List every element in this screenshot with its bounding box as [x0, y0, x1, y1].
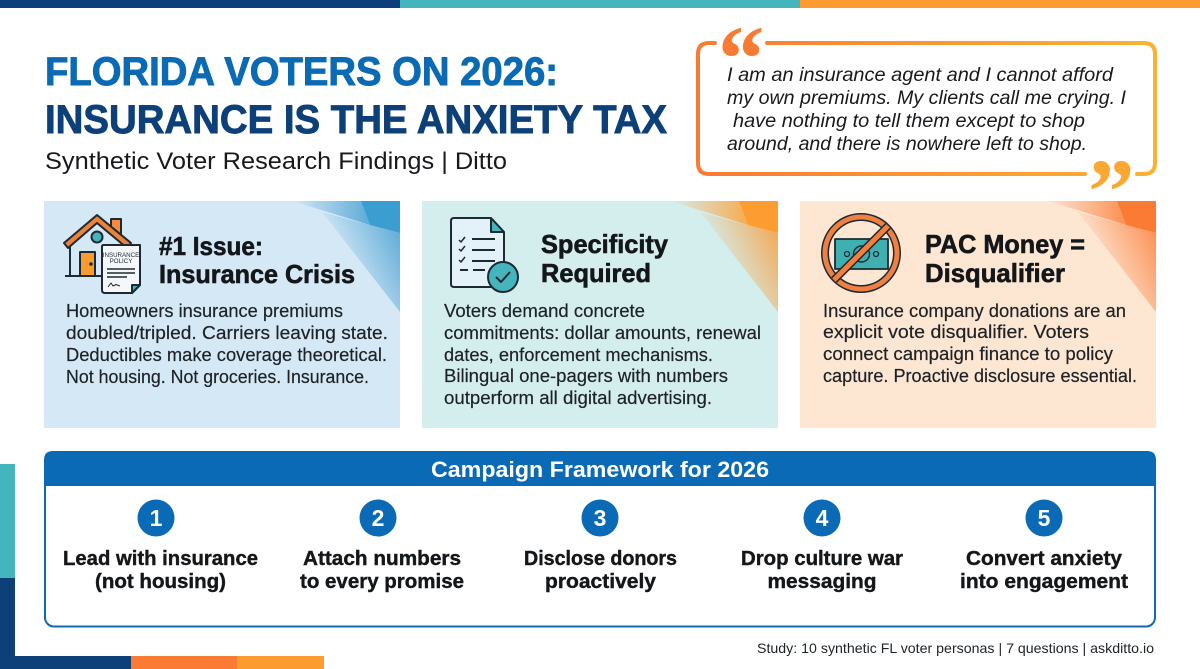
body text: commitments: dollar amounts, renewal — [444, 322, 761, 343]
body text: dates, enforcement mechanisms. — [444, 344, 713, 365]
icon: checklist — [451, 218, 518, 292]
title: FLORIDA VOTERS ON 2026: — [45, 50, 558, 94]
icon: house with policy — [64, 215, 140, 293]
step 2: 2 — [372, 505, 384, 531]
quote mark open: “ — [718, 8, 764, 111]
body text — [444, 300, 761, 408]
step 1: (not housing) — [95, 571, 226, 593]
framework header: Campaign Framework for 2026 — [431, 457, 769, 482]
body text: Insurance company donations are an — [823, 300, 1126, 321]
step 1 — [63, 500, 258, 593]
icon: no money — [825, 217, 897, 289]
top colour bar — [0, 0, 1200, 8]
heading — [541, 229, 669, 288]
heading: Specificity — [541, 229, 669, 259]
body text: Not housing. Not groceries. Insurance. — [66, 366, 369, 387]
step 4: Drop culture war — [741, 548, 903, 570]
body text: Voters demand concrete — [444, 300, 645, 321]
icon: house with policy: POLICY — [110, 258, 132, 265]
panel: campaign framework — [44, 451, 1156, 626]
left and bottom colour bars — [0, 464, 324, 669]
body text: connect campaign finance to policy — [823, 343, 1114, 364]
title: INSURANCE IS THE ANXIETY TAX — [45, 98, 667, 142]
icon: house with policy: INSURANCE — [103, 252, 139, 259]
title — [45, 50, 667, 142]
step 1: 1 — [150, 505, 163, 531]
quote text: my own premiums. My clients call me crying. I — [727, 88, 1127, 109]
step 4: 4 — [816, 505, 829, 531]
heading: Required — [541, 258, 651, 288]
body text: outperform all digital advertising. — [444, 387, 712, 408]
step 3: Disclose donors — [524, 548, 677, 570]
step 3 — [524, 500, 677, 593]
heading — [159, 231, 355, 289]
step 5: 5 — [1038, 505, 1051, 531]
step 3: proactively — [545, 571, 657, 593]
subtitle: Synthetic Voter Research Findings | Ditto — [45, 148, 507, 175]
heading — [925, 229, 1085, 288]
step 5: Convert anxiety — [966, 548, 1123, 570]
quote text: have nothing to tell them except to shop — [733, 111, 1085, 132]
body text: capture. Proactive disclosure essential. — [823, 365, 1137, 386]
quote text — [727, 65, 1127, 155]
framework header — [44, 451, 1156, 486]
quote mark close: ” — [1088, 141, 1134, 244]
heading: Disqualifier — [925, 258, 1065, 288]
quote text: around, and there is nowhere left to shop. — [727, 134, 1087, 155]
body text: Bilingual one-pagers with numbers — [444, 365, 728, 386]
body text: Homeowners insurance premiums — [66, 300, 343, 321]
body text — [66, 300, 388, 387]
body text: Deductibles make coverage theoretical. — [66, 344, 387, 365]
heading: Insurance Crisis — [159, 259, 355, 289]
panel: PAC money — [800, 201, 1156, 428]
step 4 — [741, 500, 903, 593]
body text: doubled/tripled. Carriers leaving state. — [66, 322, 388, 343]
quote text: I am an insurance agent and I cannot afford — [727, 65, 1115, 86]
step 1: Lead with insurance — [63, 548, 258, 570]
heading: #1 Issue: — [159, 231, 263, 261]
heading: PAC Money = — [925, 229, 1085, 259]
footer source: Study: 10 synthetic FL voter personas | 7 questions | askditto.io — [757, 640, 1154, 656]
step 2: to every promise — [300, 571, 464, 593]
step 3: 3 — [594, 505, 606, 531]
body text — [823, 300, 1137, 386]
step 5 — [960, 500, 1128, 593]
panel: specificity required — [422, 201, 778, 428]
step 4: messaging — [768, 571, 876, 593]
step 2 — [300, 500, 464, 593]
step 5: into engagement — [960, 571, 1128, 593]
panel: insurance crisis — [44, 201, 400, 428]
step 2: Attach numbers — [303, 548, 461, 570]
body text: explicit vote disqualifier. Voters — [823, 321, 1089, 342]
quote callout — [698, 8, 1155, 244]
